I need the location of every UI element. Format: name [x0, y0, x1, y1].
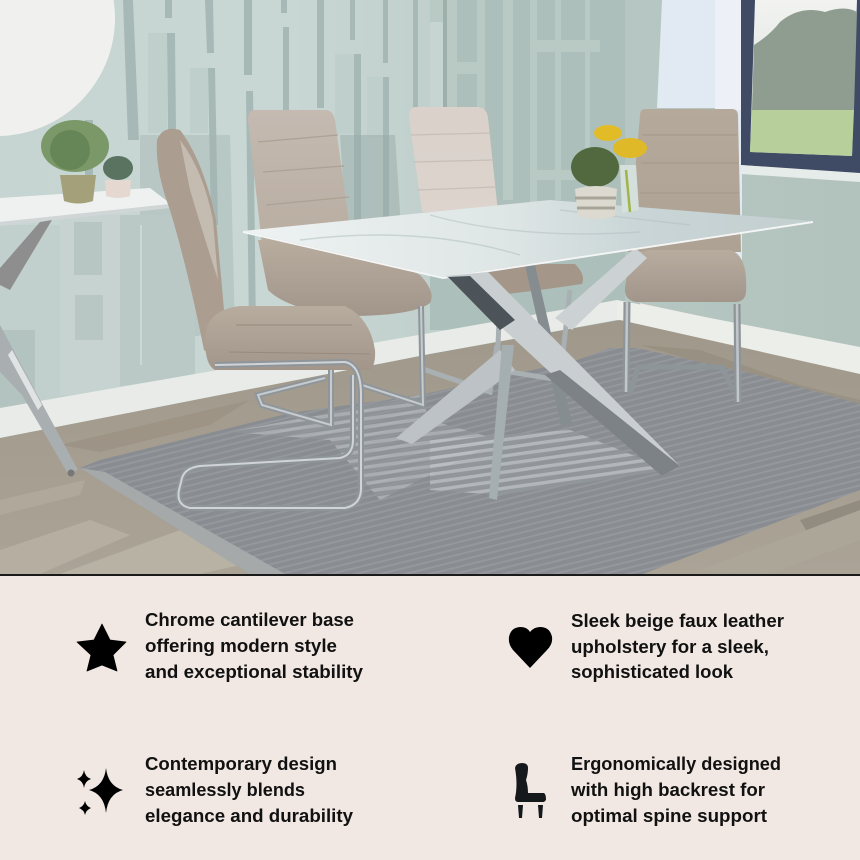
icon: star [77, 624, 126, 671]
window frame [741, 0, 860, 174]
right section panels [430, 0, 625, 330]
table top edge [243, 221, 813, 279]
text: contemporary design: elegance and durability [145, 806, 354, 826]
round mirror [0, 0, 115, 136]
icon: heart [509, 627, 552, 668]
feature: upholstery [509, 611, 784, 682]
lower left panels [0, 215, 195, 425]
text: contemporary design: Contemporary design [145, 754, 337, 774]
baseboard [0, 300, 617, 438]
text: contemporary design [145, 754, 354, 826]
text: upholstery: upholstery for a sleek, [571, 637, 769, 657]
rug lit stripes left [230, 395, 500, 500]
text: chrome base: Chrome cantilever base [145, 610, 354, 630]
feature: chrome base [77, 610, 364, 682]
window view: field [750, 110, 854, 156]
table top marble veins [300, 210, 690, 255]
icon: sparkles [77, 768, 123, 815]
feature: contemporary design [77, 754, 354, 826]
console table [0, 188, 171, 476]
rug lit stripes centre [430, 430, 670, 495]
window view: sky [750, 0, 857, 156]
floor [0, 320, 860, 574]
vase and flowers [571, 125, 647, 219]
curtain [657, 0, 742, 260]
window sill [741, 165, 860, 182]
wall shadow band [140, 135, 235, 345]
text: upholstery: sophisticated look [571, 662, 734, 682]
text: contemporary design: seamlessly blends [145, 780, 305, 800]
window view: trees [752, 8, 857, 110]
photo: dining room scene [0, 0, 860, 576]
text: ergonomic [570, 754, 781, 826]
text: chrome base: and exceptional stability [145, 662, 364, 682]
text: upholstery: Sleek beige faux leather [571, 611, 784, 631]
table legs [396, 272, 680, 500]
floor planks [0, 345, 860, 574]
dark bottom line [0, 574, 860, 576]
right baseboard [617, 300, 860, 374]
icon: chair [515, 763, 546, 818]
feature: ergonomic [515, 754, 781, 826]
text: chrome base [145, 610, 364, 682]
wall grooves [85, 0, 418, 330]
rug fringe [80, 468, 285, 574]
far middle chair [409, 107, 583, 392]
second chair [248, 110, 432, 425]
text: ergonomic: Ergonomically designed [571, 754, 781, 774]
plant left [41, 120, 133, 204]
text: ergonomic: with high backrest for [570, 780, 765, 800]
feature panel background [0, 576, 860, 860]
text: ergonomic: optimal spine support [571, 806, 767, 826]
front chair [157, 129, 375, 508]
rug [80, 348, 860, 574]
panelled wall [0, 0, 640, 440]
inset panels [148, 33, 383, 137]
right wall [625, 0, 860, 350]
far right chair [625, 109, 746, 402]
table top [243, 200, 813, 277]
table legs back [525, 248, 647, 425]
text: chrome base: offering modern style [145, 636, 337, 656]
text: upholstery [571, 611, 784, 682]
